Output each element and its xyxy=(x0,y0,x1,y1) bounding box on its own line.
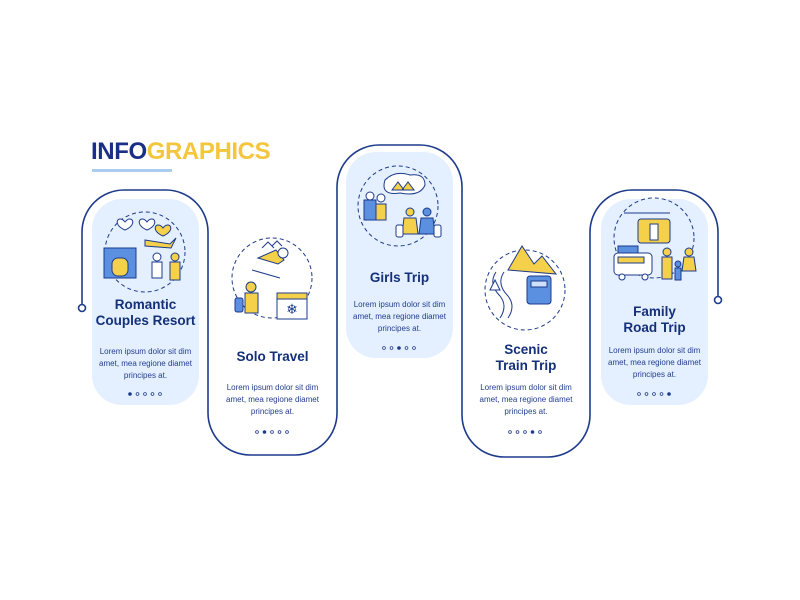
icon: train xyxy=(490,246,556,318)
text: Lorem ipsum dolor sit dim amet, mea regione diamet principes at. xyxy=(226,383,319,416)
card 4 text: Scenic xyxy=(504,342,548,357)
title underline xyxy=(92,169,172,172)
icon: solo: ❄ xyxy=(286,301,298,317)
serpentine outline xyxy=(78,145,722,457)
card 1 text: Romantic Couples Resort xyxy=(96,297,195,328)
card 3 text: Girls Trip xyxy=(370,270,429,285)
card 4 text: Train Trip xyxy=(496,358,556,373)
card 5 text xyxy=(623,304,686,335)
icon: girls xyxy=(364,173,441,237)
pagination dots xyxy=(129,347,670,433)
card 4 text xyxy=(496,342,556,373)
icon: solo xyxy=(235,241,307,319)
text: Lorem ipsum dolor sit dim amet, mea regione diamet principes at. xyxy=(480,383,572,416)
text: Lorem ipsum dolor sit dim amet, mea regione diamet principes at. xyxy=(99,347,192,380)
title: INFOGRAPHICS xyxy=(91,138,270,165)
icon: romantic xyxy=(104,219,180,280)
icon circles xyxy=(105,166,694,330)
text: Lorem ipsum dolor sit dim amet, mea regione diamet principes at. xyxy=(353,300,446,333)
icon: family xyxy=(614,213,696,280)
text: Lorem ipsum dolor sit dim amet, mea regione diamet principes at. xyxy=(608,346,701,379)
card 5 text: Family xyxy=(633,304,676,319)
card 5 text: Road Trip xyxy=(623,320,686,335)
panel fills xyxy=(92,152,708,405)
card 2 text: Solo Travel xyxy=(236,349,309,364)
